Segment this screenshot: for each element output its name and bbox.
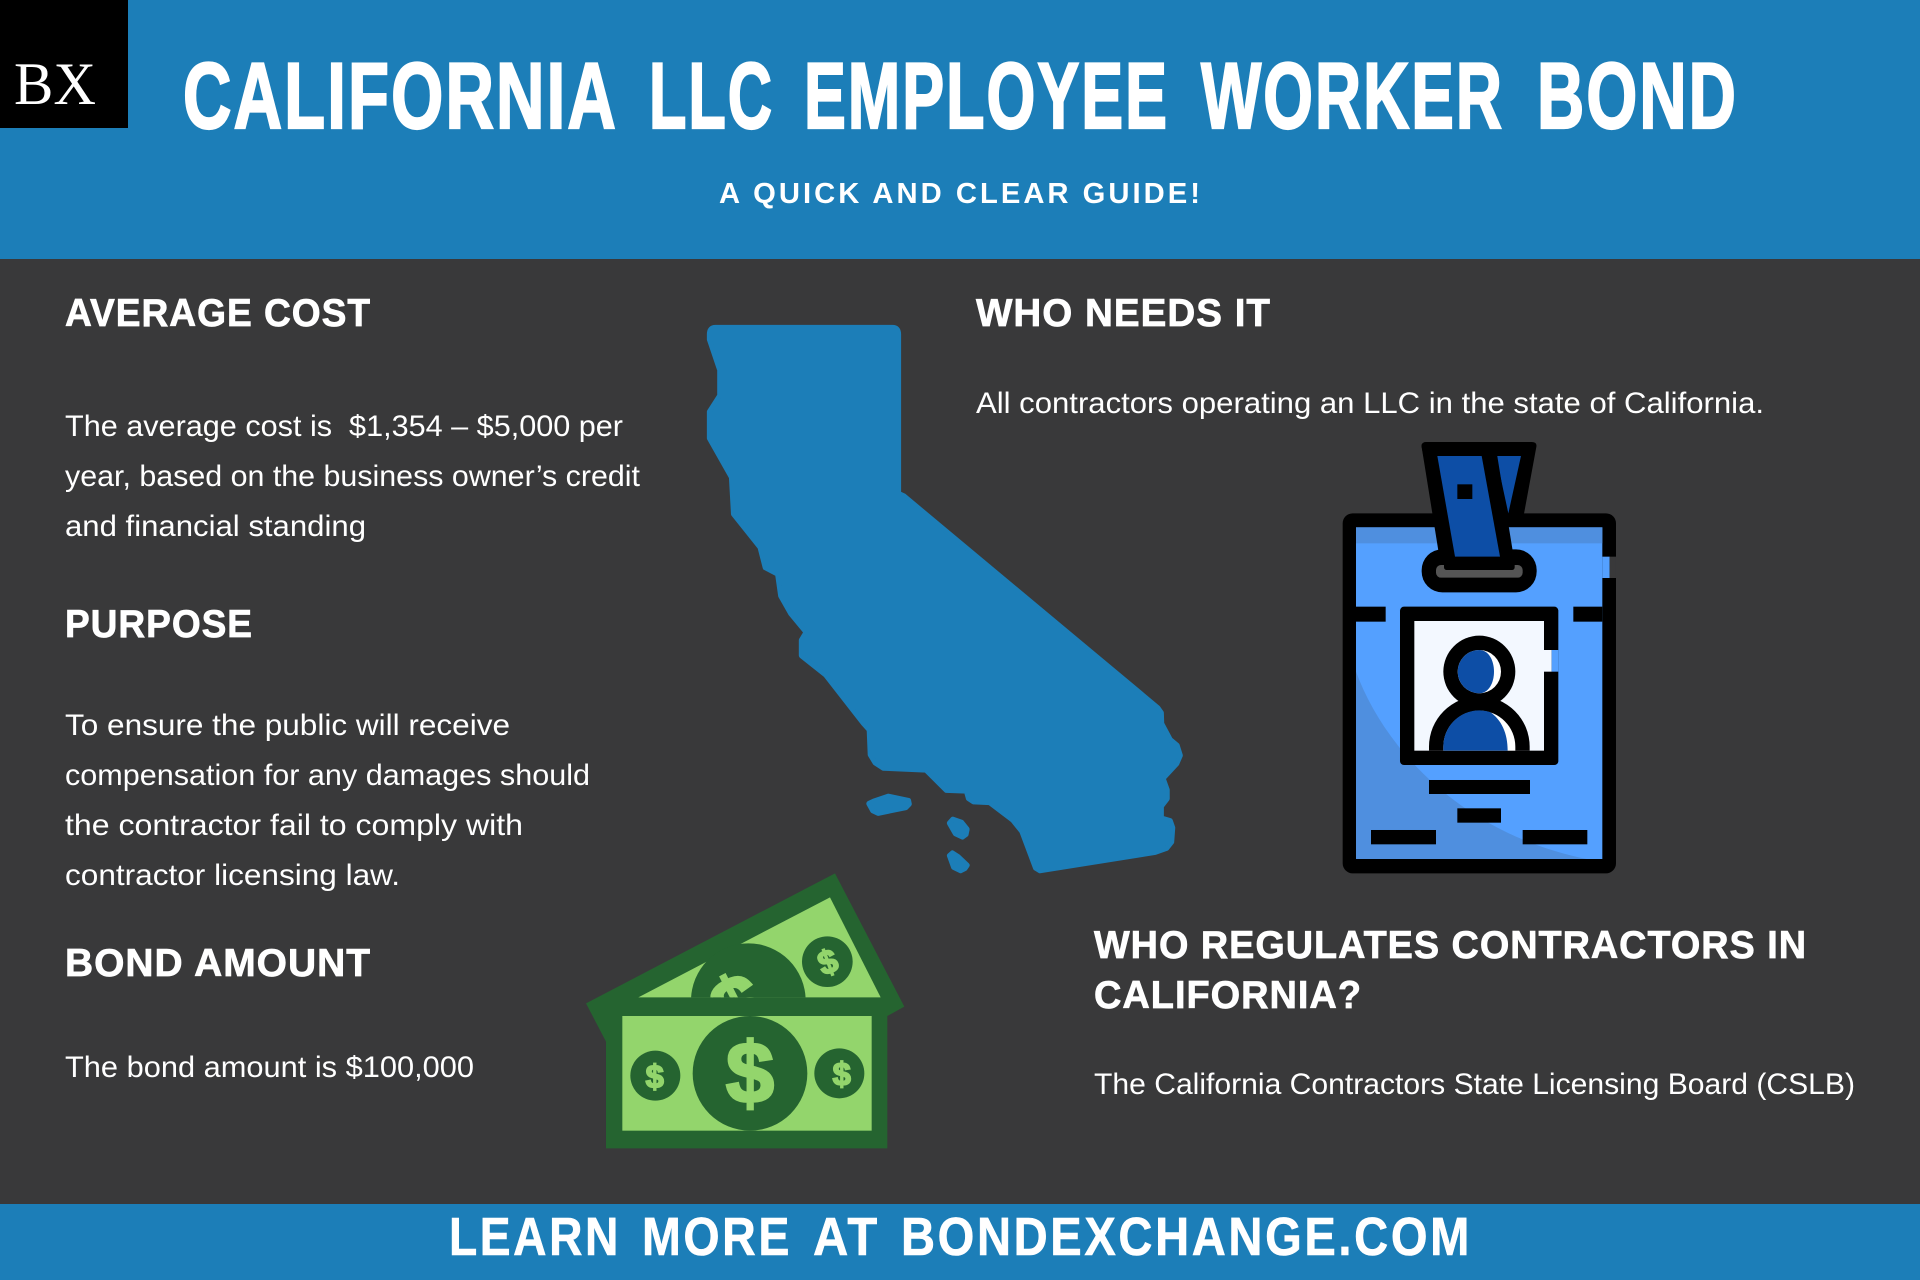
icon: money bills: $ bbox=[646, 1057, 664, 1094]
icon: money bills: $ bbox=[726, 1026, 774, 1122]
icon: money bills: $ bbox=[813, 942, 844, 983]
text: purpose body: To ensure the public will receive bbox=[65, 709, 510, 742]
panel: bond amount bbox=[65, 942, 474, 1084]
title: WORKER bbox=[1201, 43, 1504, 148]
text: who needs it body: All contractors operating an LLC in the state of California. bbox=[976, 387, 1764, 420]
footer call to action: MORE bbox=[642, 1207, 792, 1267]
footer call to action bbox=[449, 1207, 1472, 1267]
title: BOND bbox=[1537, 43, 1738, 148]
text: bond amount body: The bond amount is $100,000 bbox=[65, 1051, 474, 1084]
text: average cost body: The average cost is $1,354 – $5,000 per bbox=[65, 410, 623, 443]
logo: BX: BX bbox=[14, 51, 96, 117]
heading: average cost: AVERAGE COST bbox=[65, 292, 371, 335]
text: purpose body: compensation for any damages should bbox=[65, 759, 590, 792]
text: purpose body: contractor licensing law. bbox=[65, 859, 400, 892]
text: who regulates body: The California Contractors State Licensing Board (CSLB) bbox=[1094, 1068, 1855, 1101]
panel: purpose bbox=[65, 603, 590, 892]
title: EMPLOYEE bbox=[804, 43, 1169, 148]
heading: purpose: PURPOSE bbox=[65, 603, 253, 646]
panel: footer banner bbox=[0, 1204, 1920, 1280]
heading: bond amount: BOND AMOUNT bbox=[65, 942, 371, 985]
subtitle: A QUICK AND CLEAR GUIDE! bbox=[719, 178, 1203, 210]
text: average cost body: and financial standing bbox=[65, 510, 366, 543]
text: purpose body: the contractor fail to comply with bbox=[65, 809, 523, 842]
title: CALIFORNIA bbox=[183, 43, 618, 148]
logo: BX bbox=[0, 0, 128, 128]
heading: who regulates: WHO REGULATES CONTRACTORS IN bbox=[1094, 924, 1807, 967]
heading: who regulates bbox=[1094, 924, 1807, 1017]
heading: who needs it: WHO NEEDS IT bbox=[976, 292, 1271, 335]
panel: who regulates bbox=[1094, 924, 1855, 1101]
footer call to action: BONDEXCHANGE.COM bbox=[901, 1207, 1472, 1267]
icon: money bills bbox=[586, 873, 904, 1148]
icon: money bills: $ bbox=[833, 1055, 851, 1092]
map: California bbox=[709, 328, 1180, 871]
heading: who regulates: CALIFORNIA? bbox=[1094, 974, 1362, 1017]
footer call to action: LEARN bbox=[449, 1207, 621, 1267]
panel: who needs it bbox=[976, 292, 1764, 420]
title: LLC bbox=[649, 43, 774, 148]
icon: money bills: $ bbox=[696, 954, 782, 1061]
text: average cost body: year, based on the business owner’s credit bbox=[65, 460, 641, 493]
panel: header banner bbox=[0, 0, 1920, 259]
footer call to action: AT bbox=[813, 1207, 880, 1267]
icon: ID badge bbox=[1343, 442, 1616, 873]
title bbox=[183, 43, 1738, 148]
panel: average cost bbox=[65, 292, 641, 543]
text: purpose body bbox=[65, 709, 590, 892]
text: average cost body bbox=[65, 410, 641, 543]
